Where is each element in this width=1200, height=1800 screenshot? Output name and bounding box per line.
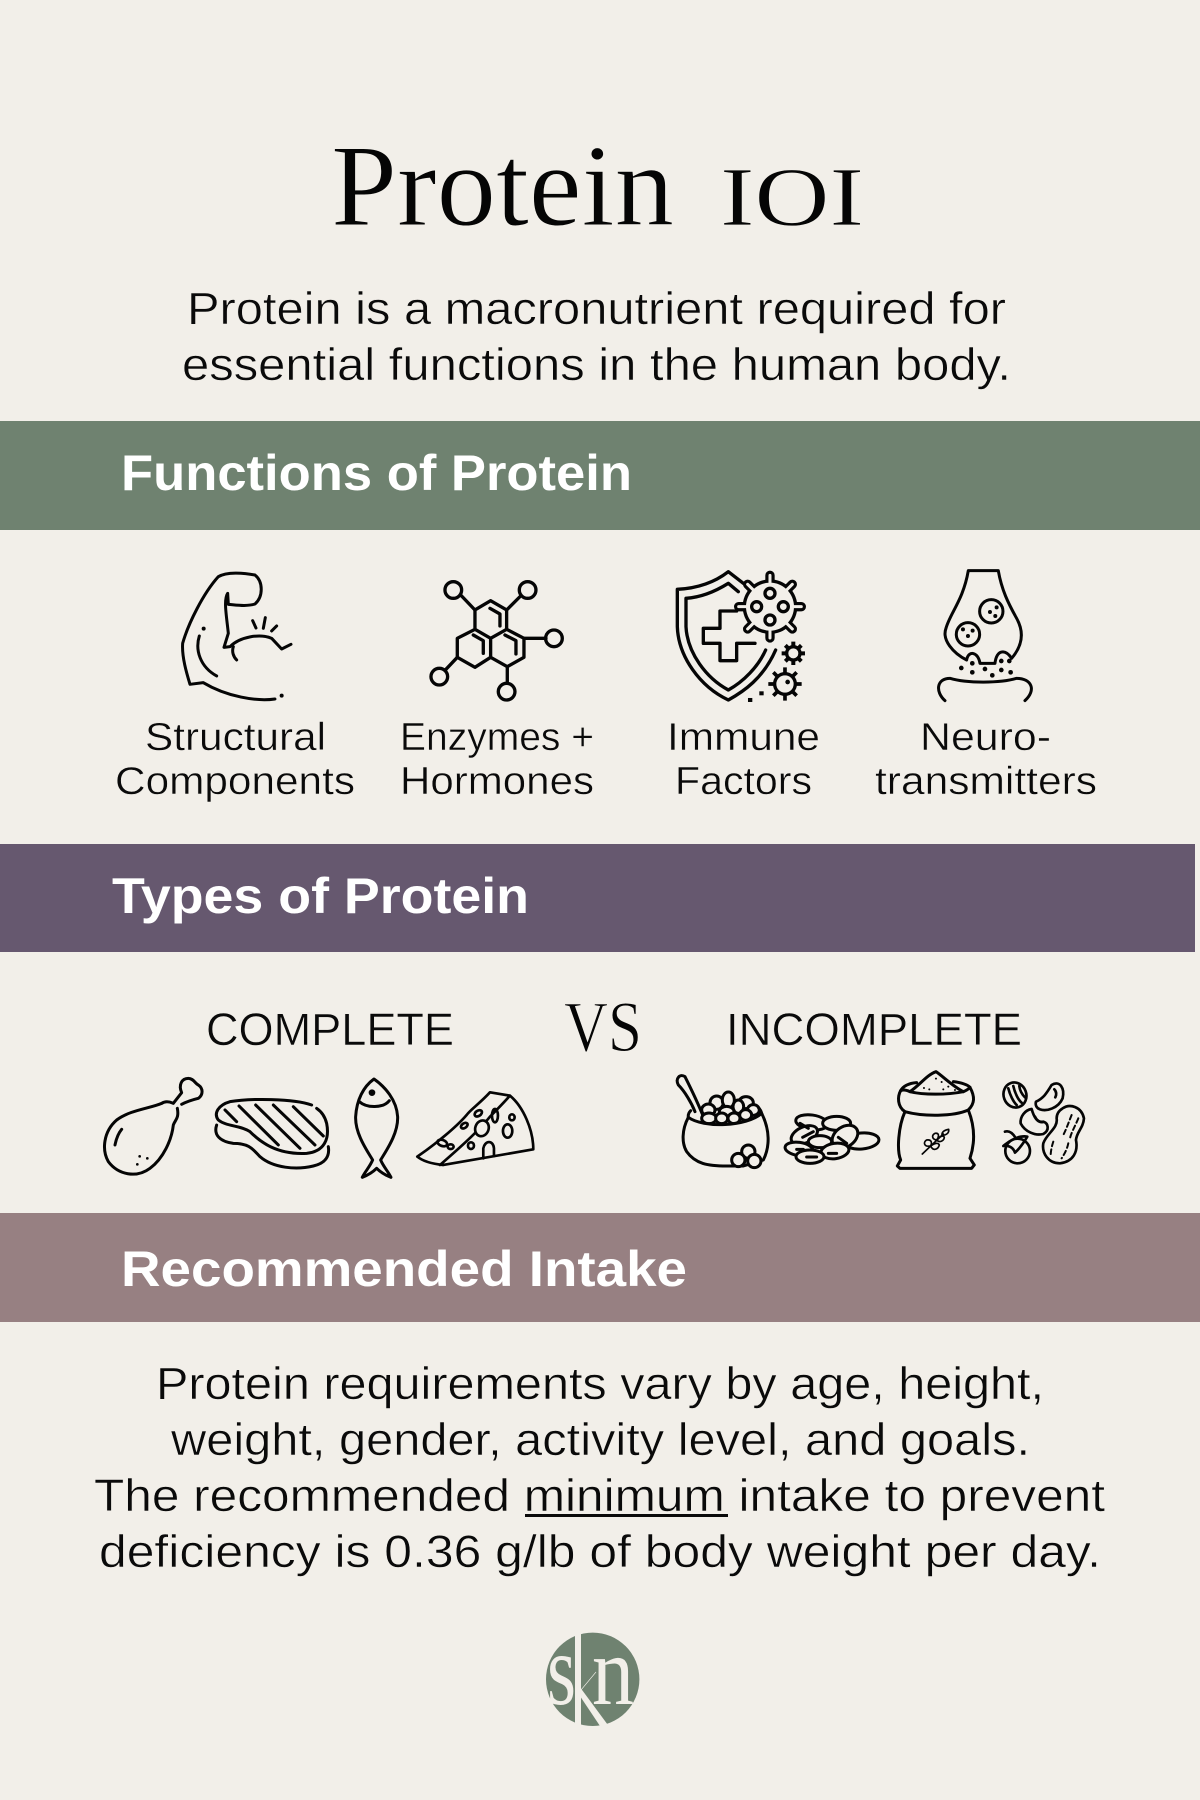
label: neurotransmitters: transmitters [875, 760, 1097, 803]
recommended intake text [94, 1358, 1106, 1577]
icon: nuts and legumes [1000, 1079, 1084, 1163]
icon: neurotransmitter synapse [939, 571, 1031, 701]
logo: skn circle [546, 1614, 639, 1727]
icon: cheese [417, 1092, 533, 1165]
icon: fish [356, 1079, 398, 1177]
recommended intake text: Protein requirements vary by age, height, [156, 1358, 1044, 1409]
recommended intake text: deficiency is 0.36 g/lb of body weight per day. [99, 1526, 1101, 1577]
label: enzymes and hormones [400, 716, 594, 803]
icon: flexed muscle [183, 573, 291, 700]
label: immune factors: Immune [667, 716, 820, 759]
title [331, 122, 864, 251]
intro text: Protein is a macronutrient required for [187, 283, 1006, 334]
logo: skn circle: n [592, 1618, 634, 1726]
label: structural components: Components [115, 760, 355, 803]
icon: steak [216, 1099, 329, 1168]
panel: types heading band [0, 844, 1195, 952]
recommended intake text: The recommended minimum intake to prevent [94, 1470, 1106, 1521]
logo: skn circle: s [547, 1614, 576, 1727]
title: Protein [331, 122, 674, 251]
icon: molecule [431, 582, 562, 700]
recommended intake text: weight, gender, activity level, and goals. [170, 1414, 1030, 1465]
label: enzymes and hormones: Enzymes + [400, 716, 594, 759]
label: complete: COMPLETE [206, 1004, 454, 1055]
label: neurotransmitters: Neuro- [920, 716, 1051, 759]
panel: recommended intake heading band: Recommended Intake [121, 1241, 687, 1297]
icon: flour sack [897, 1072, 974, 1168]
icon: pile of beans [784, 1113, 880, 1163]
label: structural components [115, 716, 355, 803]
label: immune factors: Factors [675, 760, 812, 803]
label: incomplete: INCOMPLETE [726, 1004, 1022, 1055]
panel: functions heading band [0, 421, 1200, 530]
intro text: essential functions in the human body. [182, 339, 1011, 390]
label: neurotransmitters [875, 716, 1097, 803]
title: IOI [720, 151, 864, 244]
intro text [182, 283, 1011, 390]
panel: types heading band: Types of Protein [112, 868, 529, 924]
label: versus: VS [564, 987, 642, 1067]
icon: chicken drumstick [105, 1078, 202, 1174]
panel: recommended intake heading band [0, 1213, 1200, 1322]
icon: bean bowl [677, 1076, 768, 1168]
icon: immune shield with virus [677, 572, 805, 702]
panel: functions heading band: Functions of Protein [121, 445, 632, 501]
label: structural components: Structural [145, 716, 326, 759]
label: enzymes and hormones: Hormones [400, 760, 594, 803]
label: immune factors [667, 716, 820, 803]
